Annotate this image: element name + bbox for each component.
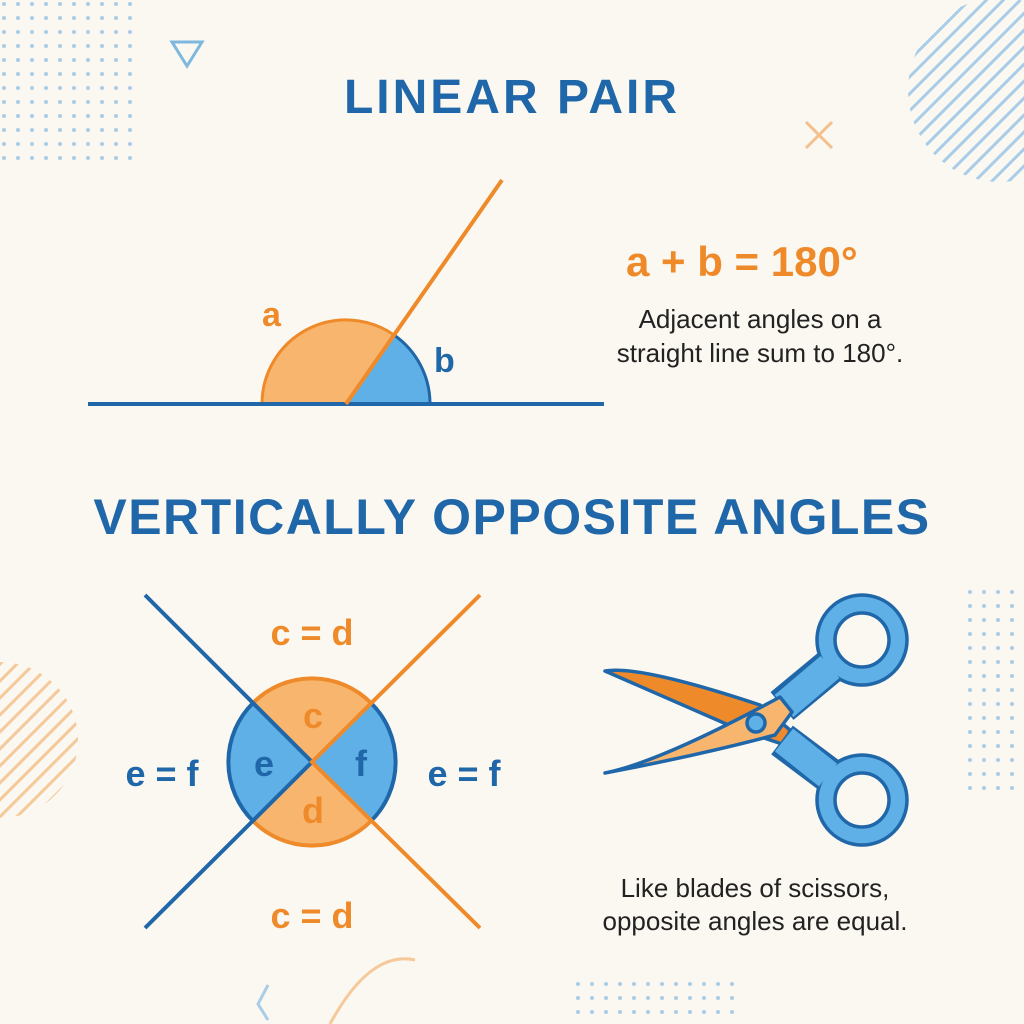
diagram: vertically opposite angles: c [303,695,323,736]
icon: scissors [603,593,909,847]
diagram: linear pair: b [434,342,455,380]
angle a sector [262,320,394,404]
text: linear pair description [617,304,903,368]
handle shank outlines [782,658,840,706]
lower blade (light orange) [605,697,792,773]
title: vertically opposite angles: VERTICALLY OPPOSITE ANGLES [93,489,931,545]
diagram: linear pair [88,178,604,406]
diagram: vertically opposite angles: e = f [427,753,502,794]
diagram: vertically opposite angles [125,594,502,936]
diagram: vertically opposite angles: d [302,790,324,831]
angle b sector [346,335,430,404]
text: linear pair description: Adjacent angles on a [639,304,881,334]
handle shank fills [784,667,830,706]
handle rings [817,595,907,845]
diagram: vertically opposite angles: e = f [125,753,200,794]
text: scissors caption: opposite angles are equal. [602,906,908,936]
diagram: vertically opposite angles: c = d [270,895,354,936]
text: linear pair description: straight line sum to 180°. [617,338,903,368]
text: scissors caption [602,873,908,936]
diagram: linear pair: a [262,296,282,334]
formula: a + b = 180: a + b = 180° [626,238,858,285]
diagram: vertically opposite angles: e [254,743,274,784]
diagram: vertically opposite angles: f [355,743,368,784]
text: scissors caption: Like blades of scissors, [621,873,889,903]
diagram: vertically opposite angles: c = d [270,612,354,653]
title: linear pair: LINEAR PAIR [344,71,680,124]
upper blade (dark orange) [605,670,790,745]
